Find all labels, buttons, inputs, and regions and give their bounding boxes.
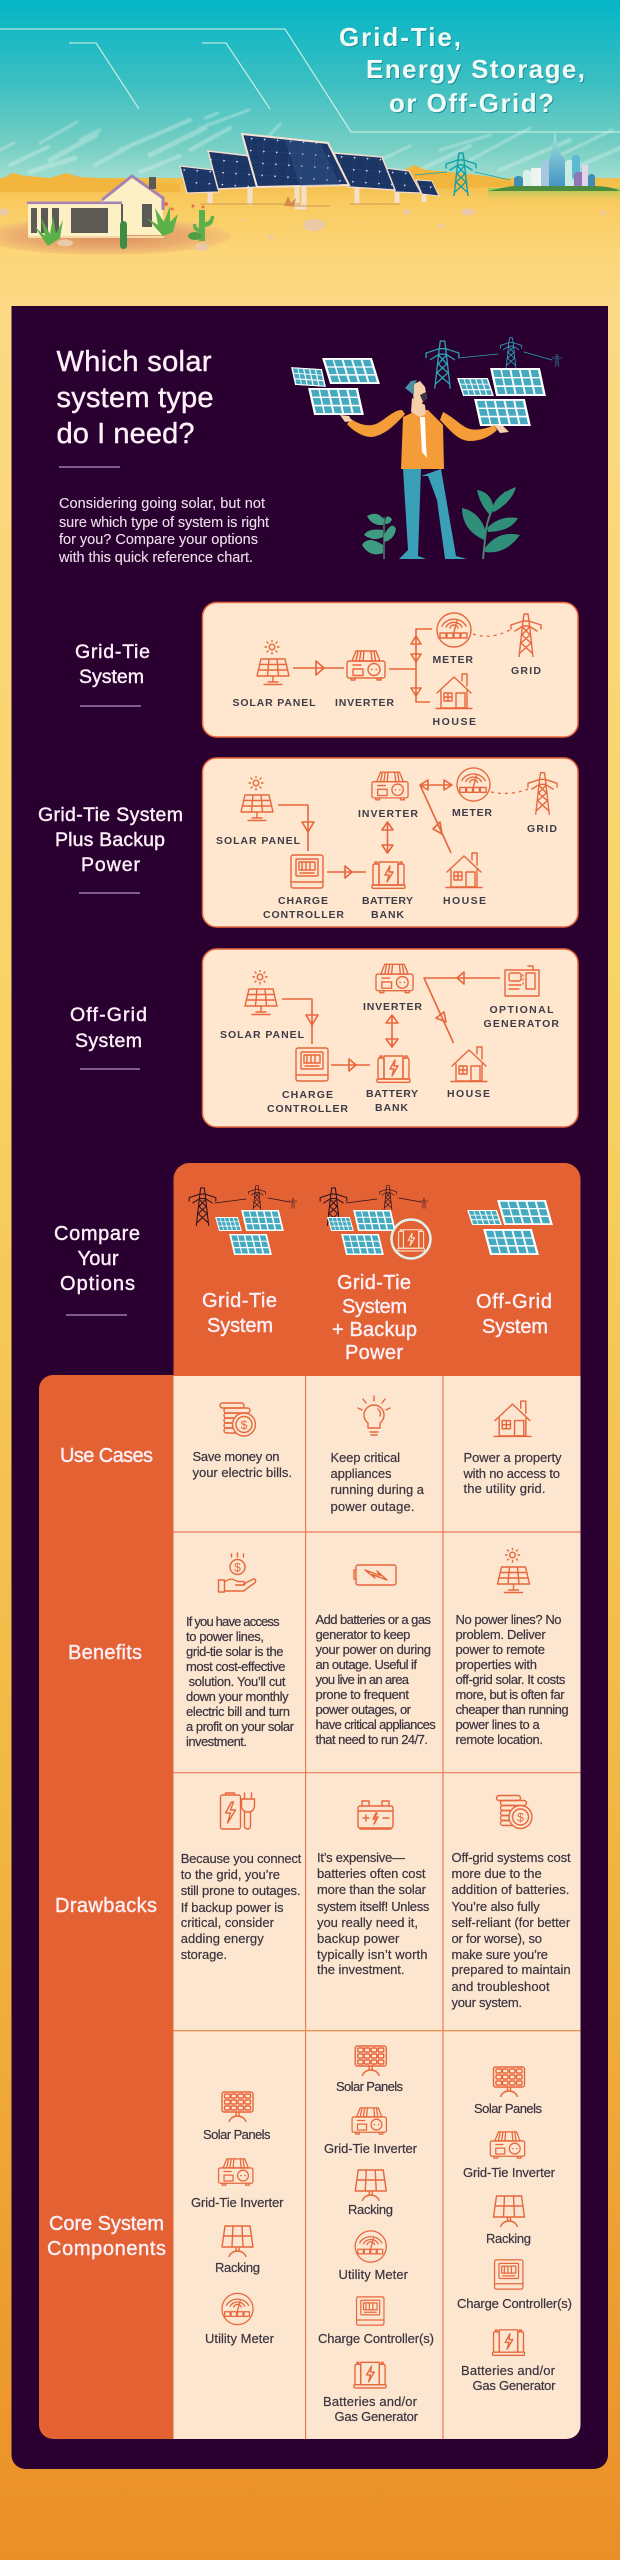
right plant xyxy=(462,487,520,559)
icon: house xyxy=(446,853,482,888)
sand xyxy=(0,178,620,306)
use case: off-grid: Power a property xyxy=(464,1450,562,1465)
drawbacks: backup: system itself! Unless xyxy=(317,1899,430,1914)
drawbacks: off-grid: addition of batteries. xyxy=(452,1882,569,1897)
column title: Grid-Tie System: System xyxy=(207,1315,273,1337)
benefits: backup: Add batteries or a gas xyxy=(316,1612,432,1627)
row label: Off-Grid System xyxy=(70,1004,147,1052)
row label: Off-Grid System: Off-Grid xyxy=(70,1004,147,1026)
icon: house xyxy=(451,1047,487,1082)
components: grid-tie: Utility Meter xyxy=(205,2331,275,2346)
intro paragraph: Considering going solar, but not xyxy=(59,496,265,512)
icon: inverter xyxy=(376,964,413,993)
arrow: controller to battery xyxy=(331,1059,370,1071)
drawbacks: grid-tie: to the grid, you’re xyxy=(181,1867,280,1882)
compare heading: Compare xyxy=(54,1223,140,1245)
labels: SOLAR PANEL xyxy=(216,835,301,847)
soil under house xyxy=(0,217,231,255)
intro paragraph: with this quick reference chart. xyxy=(58,550,253,566)
icon: solar panel xyxy=(245,970,277,1014)
drawbacks: backup: more than the solar xyxy=(317,1882,427,1897)
column title: Off-Grid System xyxy=(476,1291,552,1338)
labels: CHARGE xyxy=(282,1089,333,1101)
benefits: off-grid: properties with xyxy=(456,1657,537,1672)
compare heading: Your xyxy=(78,1248,119,1270)
use case: backup xyxy=(330,1450,425,1514)
drawbacks: grid-tie: adding energy xyxy=(181,1931,264,1946)
arrow: controller to battery xyxy=(327,866,366,878)
icon: inverter xyxy=(347,651,385,680)
mountains xyxy=(0,165,520,192)
benefits: grid-tie: If you have access xyxy=(186,1614,280,1629)
labels: CHARGE xyxy=(278,895,328,907)
components: grid-tie: Racking xyxy=(215,2260,260,2275)
icon: meter xyxy=(457,768,490,801)
drawbacks: off-grid: more due to the xyxy=(452,1866,542,1881)
icon: hand with coin xyxy=(218,1553,256,1592)
green field under city xyxy=(488,188,620,204)
drawbacks: off-grid: prepared to maintain xyxy=(452,1962,571,1977)
drawbacks: backup: batteries often cost xyxy=(317,1866,426,1881)
benefits: backup: power outages, or xyxy=(316,1702,412,1717)
labels: BATTERY xyxy=(366,1088,418,1100)
benefits: grid-tie: down your monthly xyxy=(186,1689,289,1704)
drawbacks: off-grid xyxy=(452,1850,571,2010)
drawbacks: off-grid: self-reliant (for better xyxy=(452,1915,571,1930)
column title: Off-Grid System: System xyxy=(482,1316,548,1338)
intro paragraph xyxy=(58,496,269,566)
benefits: off-grid: off-grid solar. It costs xyxy=(456,1672,566,1687)
benefits: grid-tie: grid-tie solar is the xyxy=(186,1644,284,1659)
benefits: off-grid: cheaper than running xyxy=(456,1702,569,1717)
man xyxy=(340,380,509,559)
row label: Core System Components: Components xyxy=(47,2238,166,2260)
icon: light bulb xyxy=(358,1396,390,1435)
column icon: off-grid xyxy=(467,1200,553,1255)
use case: grid-tie xyxy=(192,1449,292,1480)
drawbacks: backup: backup power xyxy=(317,1931,400,1946)
sky xyxy=(0,0,620,185)
drawbacks: off-grid: or for worse), so xyxy=(452,1931,542,1946)
icon: solar panel xyxy=(498,1548,530,1592)
components: backup: Solar Panels xyxy=(336,2079,404,2094)
use case: backup: appliances xyxy=(330,1466,392,1481)
use case: off-grid: with no access to xyxy=(462,1466,560,1481)
icon: meter xyxy=(437,613,471,647)
drawbacks: grid-tie xyxy=(181,1851,302,1962)
illustration: man juggling solar panels xyxy=(291,338,561,559)
row label: Use Cases: Use Cases xyxy=(60,1445,153,1467)
title: Energy Storage, xyxy=(366,54,585,84)
use case: backup: power outage. xyxy=(330,1499,414,1514)
labels: CONTROLLER xyxy=(263,909,344,921)
row label: Core System Components: Core System xyxy=(49,2213,164,2235)
benefits: grid-tie xyxy=(186,1614,295,1749)
labels: HOUSE xyxy=(447,1088,490,1100)
components: backup: Charge Controller(s) xyxy=(318,2331,434,2346)
row label: Grid-Tie System: System xyxy=(79,666,144,688)
dashed connection to grid xyxy=(473,630,510,636)
components: off-grid: Charge Controller(s) xyxy=(457,2296,572,2311)
heading divider xyxy=(59,466,120,468)
benefits: grid-tie: electric bill and turn xyxy=(186,1704,290,1719)
labels: BATTERY xyxy=(362,895,413,907)
drawbacks: grid-tie: If backup power is xyxy=(181,1900,284,1915)
double arrow: inverter to battery xyxy=(386,1015,398,1047)
components: off-grid xyxy=(457,2067,572,2393)
benefits: off-grid: problem. Deliver xyxy=(456,1627,546,1642)
row label: Benefits: Benefits xyxy=(68,1642,142,1664)
diagram card: Grid-Tie plus backup xyxy=(202,758,578,927)
benefits: grid-tie: solution. You’ll cut xyxy=(189,1674,286,1689)
components: backup: Utility Meter xyxy=(338,2267,409,2282)
heading: system type xyxy=(56,382,214,414)
icon: charge controller xyxy=(291,855,323,888)
icon: generator xyxy=(505,966,539,996)
compare heading: Options xyxy=(60,1273,135,1295)
column title: Grid-Tie System + Backup Power: + Backup xyxy=(332,1319,417,1341)
icon: solar panel xyxy=(257,640,289,684)
benefits: off-grid: No power lines? No xyxy=(456,1612,562,1627)
arrow: panel to inverter xyxy=(293,661,344,675)
labels: SOLAR PANEL xyxy=(232,697,316,709)
column title: Grid-Tie System + Backup Power xyxy=(332,1272,417,1364)
benefits: grid-tie: to power lines, xyxy=(186,1629,264,1644)
solar panel array xyxy=(180,134,439,207)
use case: off-grid: the utility grid. xyxy=(464,1481,546,1496)
row label: Drawbacks: Drawbacks xyxy=(55,1895,157,1917)
drawbacks: backup: the investment. xyxy=(317,1962,404,1977)
benefits: backup: generator to keep xyxy=(316,1627,410,1642)
drawbacks: grid-tie: still prone to outages. xyxy=(181,1883,300,1898)
components: backup: Gas Generator xyxy=(334,2409,419,2424)
drawbacks: backup: It’s expensive— xyxy=(317,1850,405,1865)
drawbacks: off-grid: Off-grid systems cost xyxy=(452,1850,571,1865)
components: grid-tie xyxy=(191,2092,284,2346)
use case: grid-tie: Save money on xyxy=(192,1449,280,1464)
labels: HOUSE xyxy=(432,716,476,728)
solar panels xyxy=(291,367,326,387)
drawbacks: off-grid: make sure you’re xyxy=(452,1947,548,1962)
arrow: panel to controller xyxy=(282,999,318,1044)
labels: GRID xyxy=(511,665,541,677)
column icon: grid-tie xyxy=(189,1186,297,1255)
benefits: backup: an outage. Useful if xyxy=(316,1657,417,1672)
table cells xyxy=(174,1376,580,2439)
drawbacks: grid-tie: storage. xyxy=(181,1947,227,1962)
left plant xyxy=(362,514,396,559)
dashed connection xyxy=(491,789,528,793)
arrows: inverter to meter and house xyxy=(389,629,432,702)
heading xyxy=(56,346,214,450)
arrow: panel to controller xyxy=(278,805,314,851)
benefits: off-grid: more, but is often far xyxy=(456,1687,565,1702)
row label: Off-Grid System: System xyxy=(75,1030,142,1052)
row label: Core System Components xyxy=(47,2213,166,2260)
benefits: backup: that need to run 24/7. xyxy=(316,1732,428,1747)
drawbacks: grid-tie: Because you connect xyxy=(181,1851,302,1866)
icon: car battery xyxy=(358,1801,393,1829)
title: or Off-Grid? xyxy=(389,88,554,118)
transmission tower xyxy=(415,153,510,196)
drawbacks: grid-tie: critical, consider xyxy=(181,1915,275,1930)
icon: battery xyxy=(372,862,405,888)
heading: Which solar xyxy=(56,346,212,378)
hero illustration: desert solar landscape xyxy=(0,0,620,306)
row label: Grid-Tie System Plus Backup Power xyxy=(38,804,183,876)
icon: house xyxy=(494,1401,531,1436)
column title: Grid-Tie System + Backup Power: System xyxy=(342,1296,407,1318)
benefits: backup: have critical appliances xyxy=(316,1717,436,1732)
drawbacks: off-grid: your system. xyxy=(452,1995,522,2010)
column title: Grid-Tie System: Grid-Tie xyxy=(202,1290,277,1312)
arrows: inverter meter house xyxy=(420,780,452,853)
sun beams lines xyxy=(0,29,620,132)
house xyxy=(27,176,164,238)
desert rocks xyxy=(0,208,606,251)
benefits: grid-tie: investment. xyxy=(186,1734,247,1749)
labels: GRID xyxy=(527,823,557,835)
column title: Grid-Tie System xyxy=(202,1290,277,1337)
benefits: off-grid: remote location. xyxy=(456,1732,543,1747)
drawbacks: backup: typically isn’t worth xyxy=(317,1947,428,1962)
icon: charged battery xyxy=(354,1565,396,1585)
benefits: backup xyxy=(316,1612,436,1747)
row label: Grid-Tie System: Grid-Tie xyxy=(75,641,150,663)
diagram card: Off-Grid xyxy=(202,949,578,1127)
labels: INVERTER xyxy=(363,1001,422,1013)
icon: solar panel xyxy=(241,776,273,820)
intro paragraph: sure which type of system is right xyxy=(59,515,269,531)
benefits: grid-tie: most cost-effective xyxy=(186,1659,286,1674)
labels: CONTROLLER xyxy=(267,1103,348,1115)
row label: Grid-Tie System xyxy=(75,641,150,688)
labels xyxy=(220,1001,559,1115)
benefits: backup: your power on during xyxy=(316,1642,431,1657)
benefits: backup: you live in an area xyxy=(316,1672,410,1687)
components: off-grid: Racking xyxy=(486,2231,531,2246)
components: grid-tie: Grid-Tie Inverter xyxy=(191,2195,284,2210)
components: grid-tie: Solar Panels xyxy=(203,2127,271,2142)
use case: backup: running during a xyxy=(330,1482,425,1497)
labels: METER xyxy=(452,807,492,819)
benefits: off-grid: power lines to a xyxy=(456,1717,540,1732)
labels: METER xyxy=(432,654,473,666)
drawbacks: backup xyxy=(317,1850,430,1977)
futuristic city xyxy=(488,130,620,191)
double arrow: inverter to battery xyxy=(382,822,393,853)
components: off-grid: Solar Panels xyxy=(474,2101,542,2116)
icon: inverter xyxy=(372,772,408,800)
icon: tower xyxy=(511,614,541,657)
power towers xyxy=(426,338,561,388)
row label: Grid-Tie System Plus Backup Power: Power xyxy=(81,854,140,876)
benefits: backup: prone to frequent xyxy=(316,1687,409,1702)
column icon: grid-tie plus backup xyxy=(320,1186,430,1258)
row label: Grid-Tie System Plus Backup Power: Grid-Tie System xyxy=(38,804,183,826)
intro paragraph: for you? Compare your options xyxy=(59,532,258,548)
labels: INVERTER xyxy=(358,808,418,820)
column title: Off-Grid System: Off-Grid xyxy=(476,1291,552,1313)
benefits: grid-tie: a profit on your solar xyxy=(186,1719,295,1734)
components: backup: Racking xyxy=(348,2202,393,2217)
labels: INVERTER xyxy=(335,697,394,709)
comparison table xyxy=(39,1163,580,2439)
components: off-grid: Grid-Tie Inverter xyxy=(463,2165,556,2180)
column title: Grid-Tie System + Backup Power: Grid-Tie xyxy=(337,1272,411,1294)
use case: backup: Keep critical xyxy=(330,1450,400,1465)
labels: BANK xyxy=(371,909,404,921)
drawbacks: backup: you really need it, xyxy=(317,1915,418,1930)
components: backup xyxy=(318,2046,434,2424)
benefits: off-grid xyxy=(456,1612,569,1747)
labels: HOUSE xyxy=(443,895,486,907)
icon: battery with plug xyxy=(220,1793,254,1829)
cacti and agave xyxy=(34,202,214,249)
labels xyxy=(232,654,541,728)
heading: do I need? xyxy=(56,418,194,450)
labels xyxy=(216,807,557,921)
labels: BANK xyxy=(375,1102,408,1114)
icon: charge controller xyxy=(296,1048,328,1081)
components: backup: Batteries and/or xyxy=(323,2394,418,2409)
row label: Grid-Tie System Plus Backup Power: Plus Backup xyxy=(55,829,165,851)
wispy clouds xyxy=(0,110,620,172)
column header band xyxy=(174,1163,580,1379)
labels: SOLAR PANEL xyxy=(220,1029,305,1041)
row label column xyxy=(39,1375,174,2439)
arrows: generator inverter house xyxy=(424,972,500,1043)
icon: battery xyxy=(377,1056,410,1082)
components: off-grid: Batteries and/or xyxy=(461,2363,556,2378)
use case: grid-tie: your electric bills. xyxy=(192,1465,292,1480)
compare heading xyxy=(54,1223,140,1295)
drawbacks: off-grid: and troubleshoot xyxy=(452,1979,550,1994)
icon: coins xyxy=(220,1403,256,1436)
title: Grid-Tie, xyxy=(339,22,461,52)
diagram card: Grid-Tie xyxy=(202,602,578,737)
benefits: off-grid: power to remote xyxy=(456,1642,545,1657)
components: off-grid: Gas Generator xyxy=(472,2378,556,2393)
column title: Grid-Tie System + Backup Power: Power xyxy=(345,1342,403,1364)
components: backup: Grid-Tie Inverter xyxy=(324,2141,418,2156)
labels: GENERATOR xyxy=(484,1018,559,1030)
labels: OPTIONAL xyxy=(490,1004,554,1016)
icon: house xyxy=(436,674,472,708)
icon: coins xyxy=(496,1796,532,1828)
use case: off-grid xyxy=(462,1450,562,1496)
title xyxy=(339,22,585,118)
drawbacks: off-grid: You’re also fully xyxy=(452,1899,540,1914)
icon: tower xyxy=(528,773,557,814)
